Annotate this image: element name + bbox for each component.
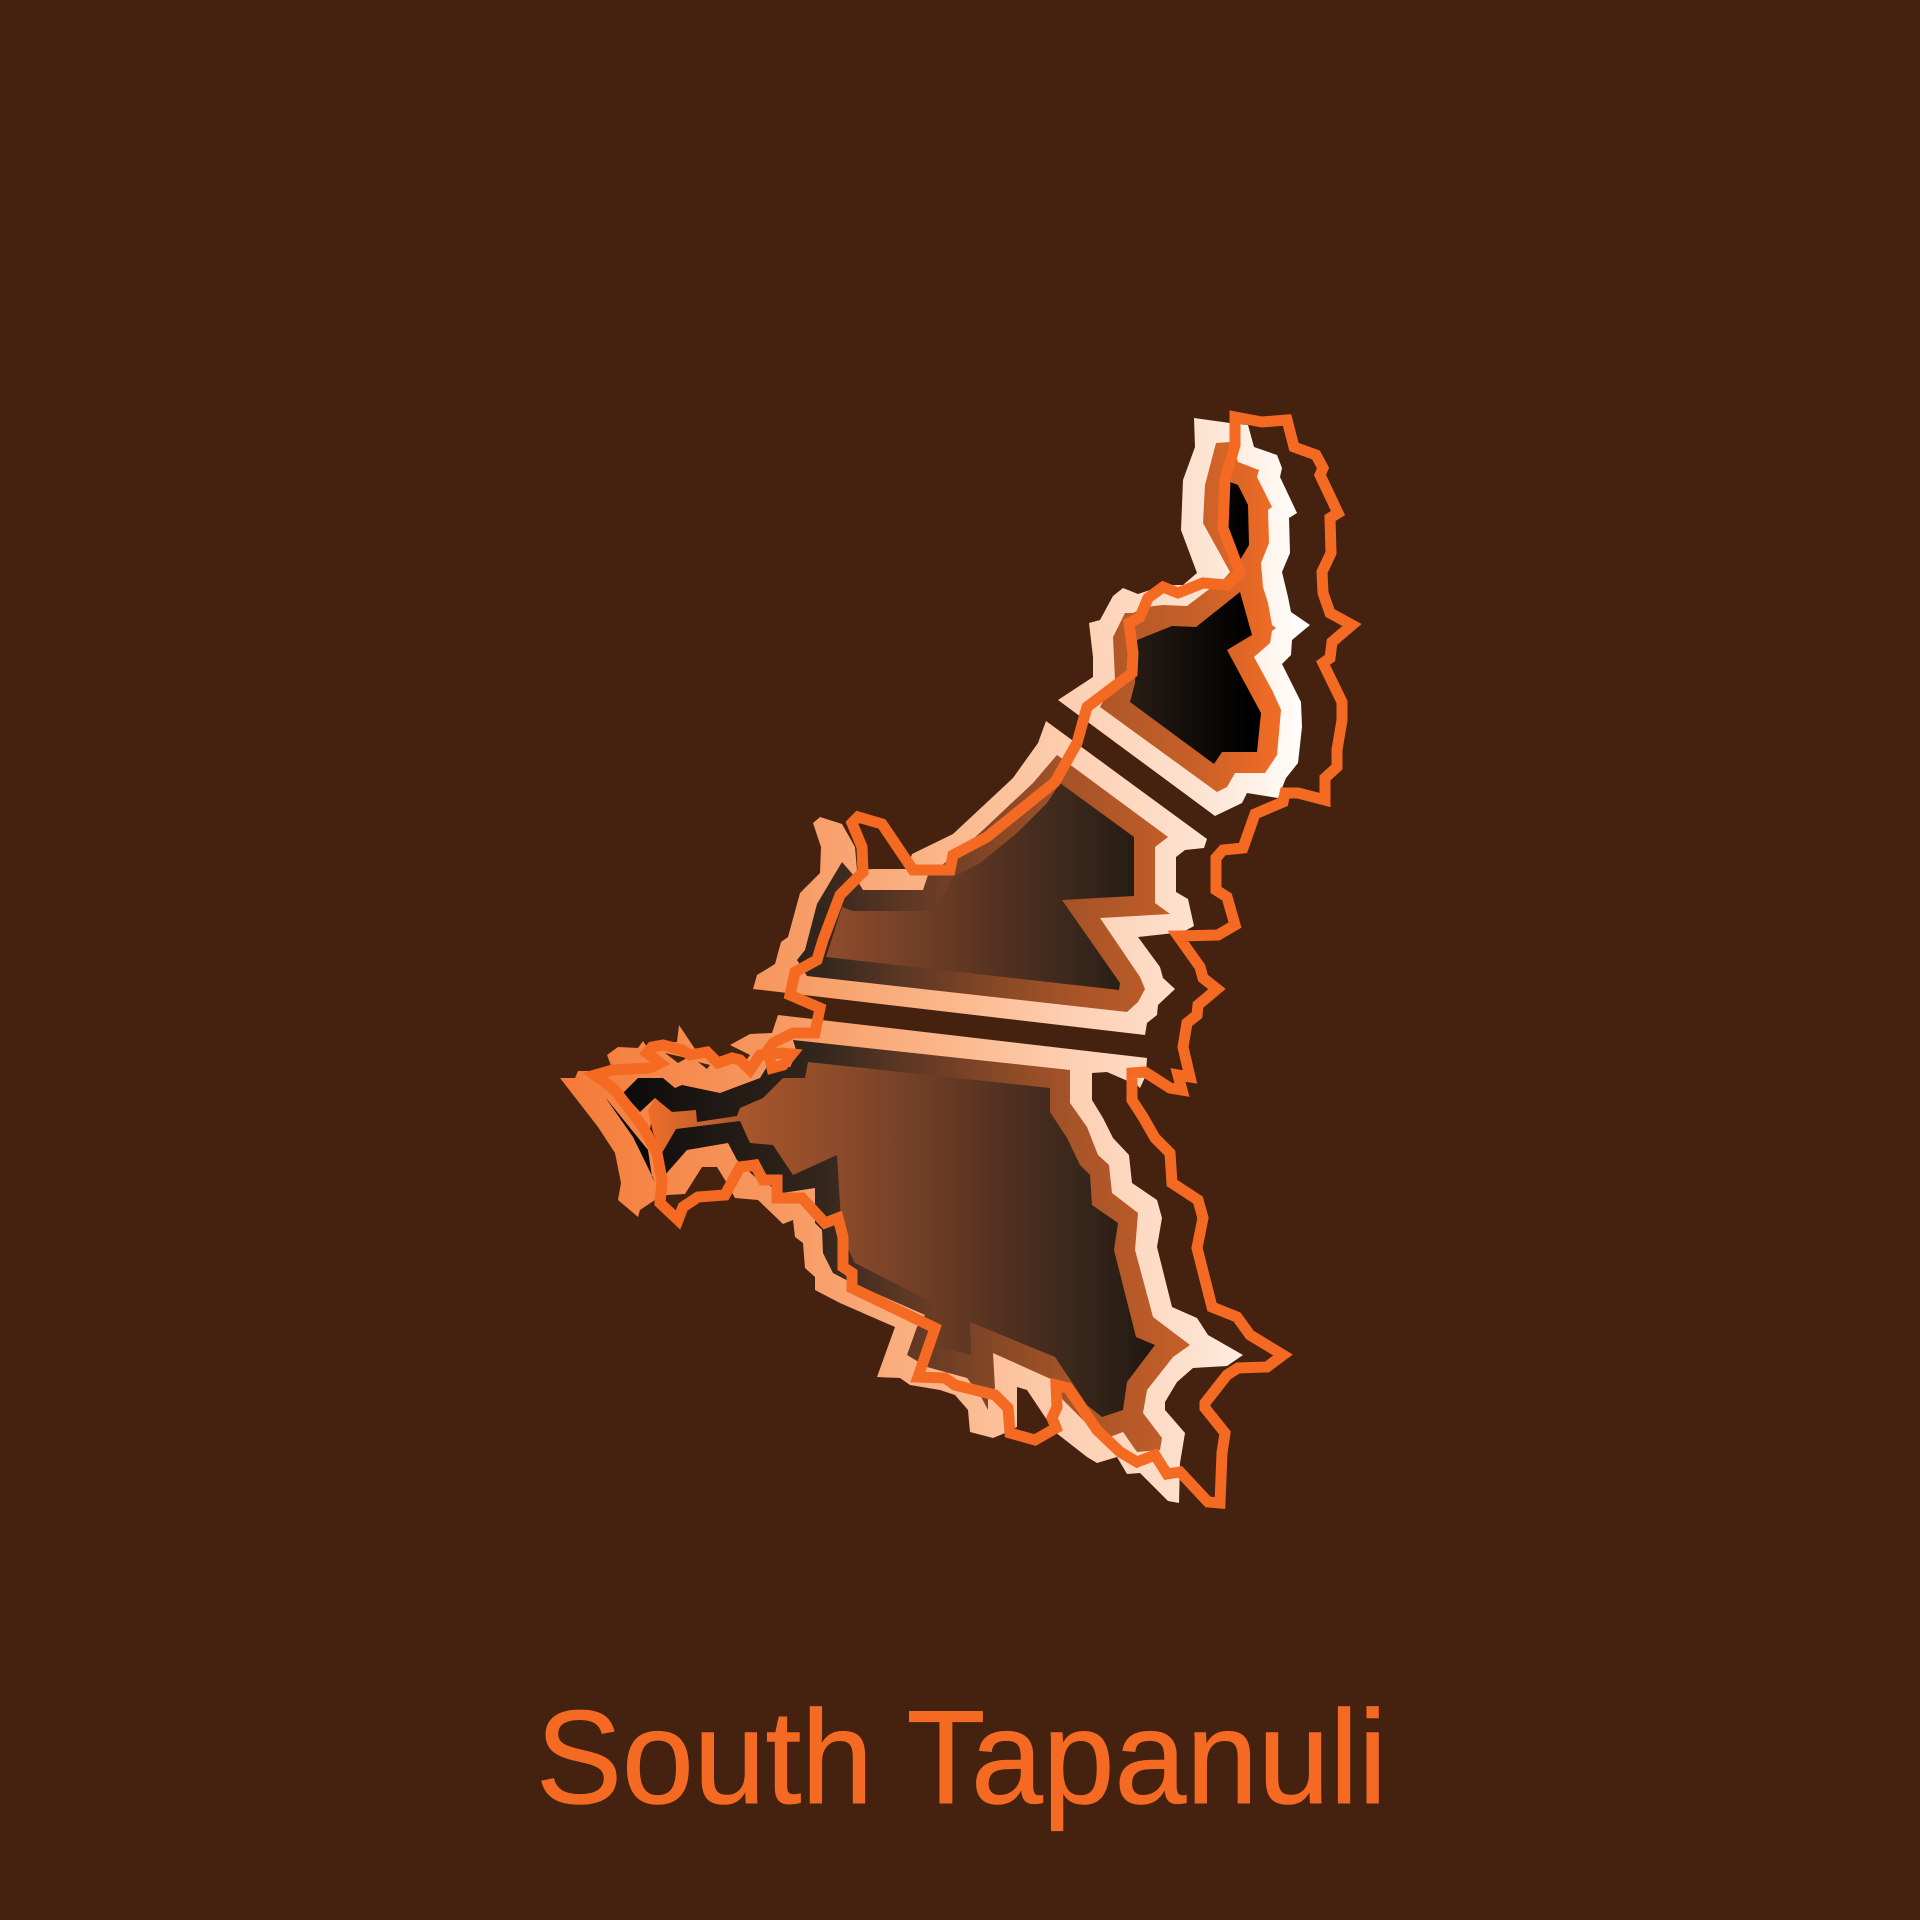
map outline stroke <box>595 417 1352 1503</box>
map layer: inner core <box>648 482 1261 1417</box>
map of South Tapanuli <box>560 417 1352 1503</box>
map layer: middle band <box>605 442 1281 1452</box>
map layer: pale outer silhouette <box>560 418 1310 1503</box>
title: South Tapanuli <box>536 1684 1387 1832</box>
